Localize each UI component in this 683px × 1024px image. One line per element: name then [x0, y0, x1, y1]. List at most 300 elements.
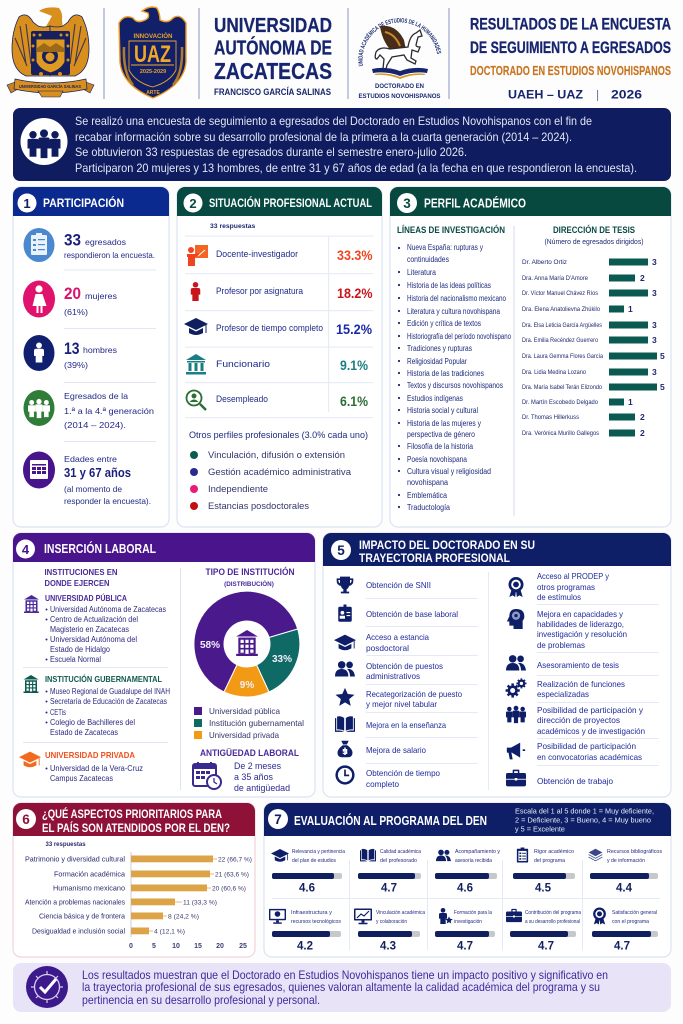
impact: PRODEP: otros programas [537, 582, 595, 592]
thesis direction chart: 2 [640, 428, 645, 438]
horizontal bar chart: 10 [172, 943, 180, 950]
research lines: Historia social y cultural [407, 406, 478, 415]
thesis direction chart: Dra. Elsa Leticia García Argüelles [522, 322, 602, 329]
item: 33 egresados: respondieron la encuesta. [64, 250, 155, 260]
number 3: 3 [403, 196, 411, 211]
government institutions: INSTITUCIÓN GUBERNAMENTAL [45, 673, 162, 684]
item: 13 hombres: 13 [64, 339, 80, 358]
panel 7: evaluación al programa [264, 803, 671, 957]
research lines: Historia de las tradiciones [407, 369, 484, 378]
impact: puestos: Obtención de puestos [366, 661, 443, 671]
thesis direction chart [522, 224, 665, 438]
horizontal bar chart: 20 (60,6 %) [212, 886, 246, 892]
item: edades: (al momento de [64, 484, 122, 494]
public universities: Universidad Autónoma del [50, 635, 137, 644]
thesis direction chart: Dr. Martín Escobedo Delgado [522, 399, 598, 406]
research lines: Nueva España: rupturas y [407, 243, 483, 252]
item: generaciones: Egresados de la [64, 391, 128, 401]
research lines: Emblemática [407, 491, 448, 500]
impact: proyectos: Posibilidad de participación y [537, 705, 644, 715]
number 1: 1 [23, 196, 31, 211]
donut legend: Universidad pública [209, 706, 280, 716]
heading: TRAYECTORIA PROFESIONAL [359, 551, 510, 565]
research lines: Literatura [407, 268, 437, 277]
number 6: 6 [22, 812, 30, 827]
horizontal bar chart: 20 [216, 943, 224, 950]
rating scale: Escala del 1 al 5 donde 1 = Muy deficiente, [515, 806, 654, 816]
item: edades: 31 y 67 años [64, 465, 131, 480]
number 5: 5 [337, 543, 345, 558]
thesis direction chart: Dra. Verónica Murillo Gallegos [522, 430, 599, 437]
item: 33 egresados [24, 228, 155, 262]
icon: check seal [26, 966, 68, 1008]
item: 13 hombres: hombres [83, 345, 117, 355]
impact: recategorización: Recategorización de puesto [366, 689, 462, 699]
number 3 [397, 193, 417, 213]
logo: Doctorado en Estudios Novohispanos pegasus [358, 18, 442, 100]
rating: infraestructura: 4.2 [297, 940, 313, 952]
rating: calidad académica: del profesorado [380, 858, 417, 864]
heading: IMPACTO DEL DOCTORADO EN SU [359, 538, 535, 552]
panel 3: perfil académico [390, 187, 671, 527]
rating: vinculación: Vinculación académica [376, 910, 425, 916]
logo: Doctorado en Estudios Novohispanos pegasus: DOCTORADO EN [375, 83, 424, 90]
heading [359, 538, 535, 565]
impact: SNII [337, 577, 431, 593]
horizontal bar chart: Formación académica [54, 872, 125, 878]
logo: Doctorado en Estudios Novohispanos pegasus: ESTUDIOS NOVOHISPANOS [358, 93, 441, 100]
impact: enseñanza: Mejora en la enseñanza [366, 720, 446, 730]
donut chart: tipo de institución [194, 566, 300, 697]
number 2: 2 [189, 196, 197, 211]
row: docente-investigador: Docente-investigador [216, 249, 298, 260]
row: desempleado: Desempleado [216, 394, 268, 405]
private university: Universidad de la Vera-Cruz [50, 764, 143, 773]
rating: relevancia: 4.6 [299, 882, 315, 894]
government institutions: Colegio de Bachilleres del [50, 718, 135, 727]
survey title [470, 14, 671, 102]
thesis direction chart: Dra. Emilia Recéndez Guerrero [522, 337, 598, 344]
horizontal bar chart: Ciencia básica y de frontera [39, 914, 125, 920]
rating: formación [435, 908, 495, 952]
rating: acompañamiento: Acompañamiento y [455, 849, 500, 855]
thesis direction chart: 3 [652, 367, 657, 377]
government institutions: CETis [50, 708, 66, 717]
item: 13 hombres: (39%) [64, 360, 88, 370]
thesis direction chart: DIRECCIÓN DE TESIS [553, 224, 635, 236]
rating: infraestructura: Infraestructura y [291, 910, 332, 916]
rating: recursos bibliográficos: 4.4 [616, 882, 633, 894]
other profiles: Independiente [208, 484, 268, 495]
heading: PARTICIPACIÓN [43, 195, 124, 210]
public universities: Magisterio en Zacatecas [50, 625, 129, 634]
research lines: Historia de las ideas políticas [407, 281, 491, 290]
rating: infraestructura: recursos tecnológicos [291, 919, 341, 925]
thesis direction chart: Dr. Víctor Manuel Chávez Ríos [522, 290, 598, 297]
impact: asesoramiento: Asesoramiento de tesis [537, 660, 619, 670]
horizontal bar chart: Patrimonio y diversidad cultural [25, 856, 125, 864]
impact: salario [338, 741, 426, 757]
rating: contribución: Contribución del programa [525, 910, 581, 916]
item: 20 mujeres: mujeres [85, 291, 117, 301]
horizontal bar chart [25, 852, 252, 950]
thesis direction chart: 2 [640, 273, 645, 283]
donut chart: tipo de institución: 33% [272, 654, 292, 665]
thesis direction chart: 2 [640, 412, 645, 422]
impact: recategorización: y mejor nivel tabular [366, 699, 437, 709]
row: docente-investigador [187, 245, 373, 266]
government institutions [24, 673, 170, 737]
other profiles: Gestión académico administrativa [208, 467, 352, 478]
thesis direction chart: Dra. Elena Anatolievna Zhúkilo [522, 306, 600, 313]
rating: relevancia [271, 849, 345, 894]
rating: satisfacción [592, 908, 658, 952]
panel 5: impacto del doctorado [323, 533, 671, 797]
horizontal bar chart: 5 [152, 943, 156, 950]
impacts left column [334, 577, 462, 789]
impact: tiempo completo: Obtención de tiempo [366, 768, 440, 778]
row: profesor de tiempo completo: 15.2% [336, 321, 372, 337]
conclusion banner [13, 963, 671, 1012]
rating: relevancia: del plan de estudios [292, 858, 336, 864]
rating: contribución [506, 909, 581, 952]
rating: rigor académico: Rigor académico [534, 849, 574, 855]
thesis direction chart: Dr. Thomas Hillerkuss [522, 414, 579, 421]
research lines: Edición y crítica de textos [407, 319, 481, 328]
other profiles: Vinculación, difusión o extensión [208, 450, 345, 461]
other profiles: Otros perfiles profesionales (3.0% cada uno) [189, 430, 368, 440]
rating: infraestructura [269, 909, 341, 952]
research lines: Filosofía de la historia [407, 442, 474, 451]
work seniority: de antigüedad [234, 783, 290, 793]
intro text [75, 114, 637, 175]
donut legend [194, 706, 304, 740]
panel 4: inserción laboral [13, 533, 315, 797]
panel 2: situación profesional actual [177, 187, 382, 527]
item: generaciones: 1.ª a la 4.ª generación [64, 406, 154, 416]
impact: capacidades: habilidades de liderazgo, [537, 619, 624, 629]
rating: contribución: a su desarrollo profesional [525, 919, 580, 925]
impact: asesoramiento [506, 655, 619, 670]
research lines: Textos y discursos novohispanos [407, 381, 503, 390]
impact: estancia: Acceso a estancia [366, 632, 429, 642]
number 4 [16, 540, 35, 558]
university name: UNIVERSIDAD [214, 15, 332, 37]
thesis direction chart: 3 [652, 320, 657, 330]
impact: base laboral: Obtención de base laboral [366, 609, 458, 619]
heading: SITUACIÓN PROFESIONAL ACTUAL [209, 195, 372, 210]
impact: capacidades: investigación y resolución [537, 629, 627, 639]
other profiles [189, 430, 368, 512]
horizontal bar chart: Desigualdad e inclusión social [32, 928, 125, 936]
research lines [397, 224, 512, 512]
thesis direction chart: Dra. María Isabel Terán Elizondo [522, 384, 602, 391]
survey title: 2026 [611, 88, 642, 102]
research lines: Poesía novohispana [407, 455, 468, 464]
panel 1: participación [13, 187, 169, 527]
impact: funciones: Realización de funciones [537, 679, 625, 689]
item: generaciones [24, 390, 154, 430]
logo: Universidad Autónoma de Zacatecas eagle crest: UNIVERSIDAD GARCÍA SALINAS [19, 82, 81, 89]
horizontal bar chart: Atención a problemas nacionales [25, 900, 125, 906]
item: 20 mujeres: 20 [64, 284, 81, 303]
item: generaciones: (2014 – 2024). [64, 420, 126, 430]
number 4: 4 [22, 542, 30, 557]
research lines: Religiosidad Popular [407, 357, 467, 366]
impact: puestos [335, 661, 443, 681]
row: profesor por asignatura [191, 282, 373, 301]
horizontal bar chart: 11 (33,3 %) [183, 900, 217, 906]
intro banner [13, 108, 671, 181]
rating: acompañamiento: 4.6 [457, 882, 473, 894]
impact: PRODEP: Acceso al PRODEP y [537, 571, 610, 581]
logo: UAZ shield innovación: 2025-2029 [140, 69, 166, 75]
row: funcionario: 9.1% [340, 357, 368, 373]
impact: salario: Mejora de salario [366, 745, 426, 755]
item: 33 egresados: 33 [64, 230, 81, 250]
number 7: 7 [274, 812, 282, 827]
research lines: Historia de las mujeres y [407, 419, 481, 428]
rating: calidad académica [358, 849, 421, 894]
rating: formación: investigación [454, 919, 482, 925]
impact: SNII: Obtención de SNII [366, 580, 431, 590]
rating scale [515, 806, 654, 834]
logo: UAZ shield innovación: UAZ [134, 41, 171, 68]
research lines: Tradiciones y rupturas [407, 344, 472, 353]
impact: funciones [506, 678, 625, 699]
rating: formación: Formación para la [454, 910, 492, 916]
conclusion text: pertinencia en su desarrollo profesional y personal. [82, 993, 320, 1007]
thesis direction chart: Dr. Alberto Ortiz [522, 259, 567, 266]
horizontal bar chart: 21 (63,6 %) [215, 872, 249, 878]
donut legend: Institución gubernamental [209, 718, 304, 728]
row: profesor por asignatura: Profesor por asignatura [216, 286, 304, 297]
donut chart: tipo de institución: 58% [200, 640, 220, 651]
row: funcionario: Funcionario [216, 359, 270, 370]
private university: UNIVERSIDAD PRIVADA [45, 750, 135, 760]
rating: contribución: 4.7 [538, 940, 554, 952]
research lines: LÍNEAS DE INVESTIGACIÓN [397, 224, 505, 236]
research lines: perspectiva de género [407, 430, 476, 439]
horizontal bar chart: 4 (12,1 %) [154, 928, 185, 936]
row: profesor de tiempo completo [184, 318, 372, 337]
university name: FRANCISCO GARCÍA SALINAS [214, 87, 331, 97]
government institutions: Secretaría de Educación de Zacatecas [50, 697, 167, 706]
survey title: UAEH – UAZ [508, 88, 583, 102]
horizontal bar chart: Humanismo mexicano [53, 886, 125, 892]
research lines: Historiografía del período novohispano [407, 332, 512, 341]
item: 20 mujeres: (61%) [64, 307, 88, 317]
government institutions: Estado de Zacatecas [50, 728, 118, 737]
rating: acompañamiento [435, 849, 500, 894]
university name: AUTÓNOMA DE [214, 36, 332, 60]
other profiles: Estancias posdoctorales [208, 501, 309, 512]
heading: EVALUACIÓN AL PROGRAMA DEL DEN [294, 813, 487, 828]
donut legend: Universidad privada [209, 730, 279, 740]
survey title: | [596, 88, 599, 102]
intro text: recabar información sobre su desarrollo profesional de la primera a la cuarta generación (2014 – 2024). [75, 130, 572, 144]
work seniority: ANTIGÜEDAD LABORAL [200, 748, 299, 759]
impact: capacidades: Mejora en capacidades y [537, 609, 624, 619]
intro text: Se realizó una encuesta de seguimiento a egresados del Doctorado en Estudios Novohispanos con el fin de [75, 114, 592, 128]
thesis direction chart: (Número de egresados dirigidos) [544, 237, 644, 246]
thesis direction chart: Dra. Anna María D'Amore [522, 275, 588, 282]
conclusion text [82, 968, 608, 1007]
public universities: Estado de Hidalgo [50, 645, 110, 654]
item: 33 egresados: egresados [85, 237, 126, 247]
research lines: Cultura visual y religiosidad [407, 467, 491, 476]
intro text: Se obtuvieron 33 respuestas de egresados durante el semestre enero-julio 2026. [75, 145, 467, 159]
thesis direction chart: Dra. Laura Gemma Flores García [522, 353, 603, 360]
icon: group of people [20, 118, 68, 165]
number 5 [331, 540, 351, 560]
row: desempleado [186, 390, 368, 410]
research lines: Estudios indígenas [407, 394, 463, 403]
impact: proyectos [506, 705, 645, 736]
rating: rigor académico: del programa [534, 858, 565, 864]
university name [214, 15, 332, 97]
heading: EL PAÍS SON ATENDIDOS POR EL DEN? [42, 822, 230, 835]
research lines: Literatura y cultura novohispana [407, 307, 501, 316]
impact: trabajo: Obtención de trabajo [537, 776, 613, 786]
donut chart: tipo de institución: 9% [240, 680, 254, 691]
impact: capacidades: de problemas [537, 640, 585, 650]
rating: vinculación [354, 908, 425, 952]
horizontal bar chart: 22 (66,7 %) [218, 856, 252, 864]
rating: rigor académico: 4.5 [535, 882, 552, 894]
public universities: Escuela Normal [50, 655, 101, 664]
logo: Universidad Autónoma de Zacatecas eagle crest [7, 7, 94, 97]
impact: tiempo completo: completo [366, 779, 399, 789]
impact: proyectos: académicos y de investigación [537, 726, 645, 736]
item: edades [23, 452, 151, 506]
horizontal bar chart: 25 [239, 943, 247, 950]
horizontal bar chart: 15 [194, 943, 202, 950]
conclusion text: Los resultados muestran que el Doctorado en Estudios Novohispanos tiene un impacto positivo y significativo en [82, 968, 608, 982]
impact: enseñanza [335, 716, 446, 732]
rating: satisfacción: con el programa [612, 919, 649, 925]
impact: PRODEP [508, 571, 610, 602]
thesis direction chart: Dra. Lidia Medina Lozano [522, 369, 586, 376]
thesis direction chart: 1 [628, 304, 633, 314]
rating scale: y 5 = Excelente [515, 824, 565, 834]
donut chart: tipo de institución: (DISTRIBUCIÓN) [224, 579, 274, 588]
research lines: continuidades [407, 255, 449, 264]
header: logos and title [6, 6, 671, 102]
rating: rigor académico [513, 848, 575, 894]
impact: convocatorias: Posibilidad de participación [537, 741, 636, 751]
logo: UAZ shield innovación [119, 7, 186, 98]
number 7 [268, 809, 288, 829]
rating: relevancia: Relevancia y pertinencia [292, 849, 345, 855]
public universities: UNIVERSIDAD PÚBLICA [45, 592, 127, 603]
institutions where they work: INSTITUCIONES EN [44, 567, 118, 577]
rating: recursos bibliográficos: y de información [607, 858, 645, 864]
thesis direction chart: 3 [652, 335, 657, 345]
row: desempleado: 6.1% [340, 393, 368, 409]
number 2 [184, 194, 202, 212]
impact: proyectos: dirección de proyectos [537, 715, 620, 725]
impact: puestos: administrativos [366, 671, 420, 681]
impact: convocatorias [507, 741, 642, 762]
research lines: Historia del nacionalismo mexicano [407, 294, 507, 303]
public universities [24, 592, 166, 664]
heading: PERFIL ACADÉMICO [424, 196, 526, 210]
public universities: Centro de Actualización del [50, 615, 138, 624]
rating: recursos bibliográficos: Recursos bibliográficos [607, 849, 662, 855]
rating: vinculación: 4.3 [380, 940, 396, 952]
panel 6: aspectos prioritarios [13, 803, 255, 957]
impact: estancia: posdoctoral [366, 643, 409, 653]
logo: UAZ shield innovación: ARTE [146, 90, 160, 96]
research lines: novohispana [407, 478, 449, 487]
horizontal bar chart: 8 (24,2 %) [168, 914, 199, 920]
logo: Doctorado en Estudios Novohispanos pegasus: UNIDAD ACADÉMICA DE ESTUDIOS DE LA HUMANIDADES [358, 18, 442, 66]
row: profesor de tiempo completo: Profesor de tiempo completo [216, 323, 323, 334]
item: edades: Edades entre [64, 454, 117, 464]
row: funcionario [186, 354, 368, 374]
heading: ¿QUÉ ASPECTOS PRIORITARIOS PARA [42, 808, 222, 821]
item: 13 hombres [24, 335, 117, 371]
public universities: Universidad Autónoma de Zacatecas [50, 605, 166, 614]
impact: capacidades [507, 609, 627, 650]
institutions where they work: DONDE EJERCEN [44, 578, 110, 588]
rating: vinculación: y colaboración [376, 919, 407, 925]
row: docente-investigador: 33.3% [337, 247, 373, 263]
work seniority: a 35 años [234, 772, 273, 782]
intro text: Participaron 20 mujeres y 13 hombres, de entre 31 y 67 años de edad (a la fecha en que respondieron la encuesta). [75, 161, 637, 175]
impact: convocatorias: en convocatorias académicas [537, 752, 642, 762]
number 6 [16, 809, 36, 829]
work seniority: De 2 meses [234, 761, 281, 771]
institutions where they work [19, 567, 170, 783]
government institutions: Museo Regional de Guadalupe del INAH [50, 687, 170, 696]
impacts right column [506, 571, 645, 786]
impact: base laboral [338, 604, 458, 622]
thesis direction chart: 1 [628, 397, 633, 407]
private university: Campus Zacatecas [50, 774, 113, 783]
rating: calidad académica: Calidad académica [380, 849, 421, 855]
impact: PRODEP: de estímulos [537, 592, 581, 602]
research lines: Traductología [407, 503, 451, 512]
thesis direction chart: 3 [652, 257, 657, 267]
impact: recategorización [336, 688, 462, 709]
heading [42, 808, 230, 835]
impact: estancia [334, 632, 429, 653]
conclusion text: la trayectoria profesional de sus egresados, quienes valoran altamente la calidad académica del programa y su [82, 980, 600, 994]
impact: funciones: especializadas [537, 689, 589, 699]
row: profesor por asignatura: 18.2% [337, 285, 373, 301]
item: edades: responder la encuesta). [64, 496, 151, 506]
rating: recursos bibliográficos [589, 849, 662, 894]
rating: satisfacción: Satisfacción general [612, 910, 657, 916]
impact: tiempo completo [335, 765, 440, 789]
thesis direction chart: 5 [660, 382, 665, 392]
thesis direction chart: 3 [652, 288, 657, 298]
horizontal bar chart: 0 [129, 943, 133, 950]
impact: trabajo [506, 770, 613, 786]
rating: satisfacción: 4.7 [614, 940, 630, 952]
rating: calidad académica: 4.7 [381, 882, 397, 894]
university name: ZACATECAS [214, 58, 332, 84]
heading: INSERCIÓN LABORAL [44, 541, 156, 556]
respondents note: 33 respuestas [46, 842, 86, 848]
rating: acompañamiento: asesoría recibida [455, 858, 492, 864]
work seniority [193, 748, 299, 793]
logo: UAZ shield innovación: INNOVACIÓN [134, 32, 172, 40]
rating: formación: 4.7 [457, 940, 473, 952]
thesis direction chart: 5 [660, 351, 665, 361]
